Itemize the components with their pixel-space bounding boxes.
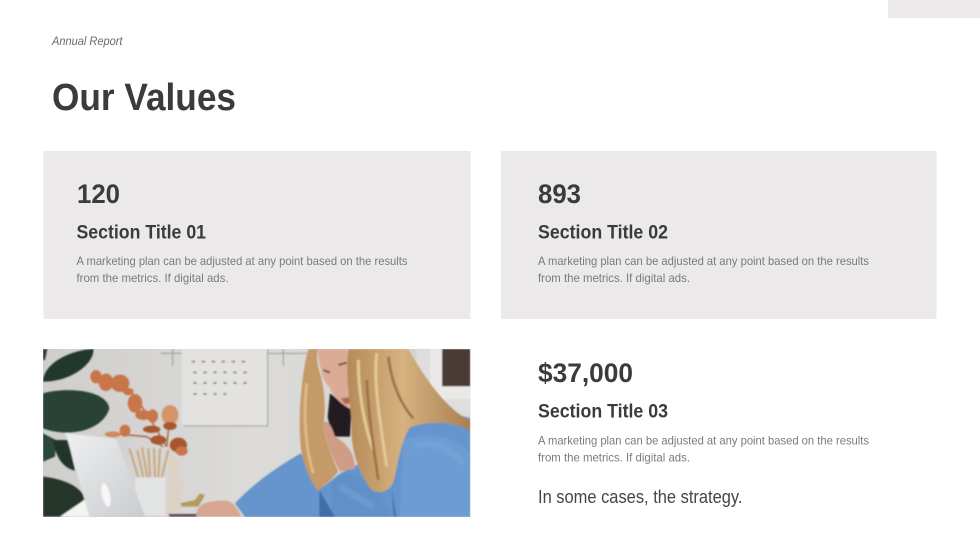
eucalyptus branch — [120, 392, 170, 448]
body text 03 — [538, 434, 869, 464]
face — [317, 349, 350, 408]
vase — [164, 456, 183, 513]
stat: 893: 893 — [538, 179, 581, 209]
pencils and cup — [129, 447, 168, 477]
closing line: In some cases, the strategy. — [538, 487, 742, 507]
eyebrow: Annual Report: Annual Report — [51, 36, 123, 48]
body text 03: A marketing plan can be adjusted at any point based on the results — [538, 434, 869, 448]
body text 02: A marketing plan can be adjusted at any point based on the results — [538, 254, 869, 268]
heading: section title 03: Section Title 03 — [538, 402, 668, 422]
phone — [328, 393, 352, 437]
hand at ear — [323, 422, 355, 472]
panel: section 02 — [501, 151, 936, 319]
heading: section title 02: Section Title 02 — [538, 222, 668, 244]
photo: woman on phone at desk — [43, 347, 470, 517]
gold object and hand on desk — [180, 493, 205, 507]
desk — [60, 501, 97, 517]
plant leaves — [43, 349, 93, 382]
body text 02 — [538, 254, 869, 285]
body text 01: from the metrics. If digital ads. — [76, 271, 228, 285]
body text 01: A marketing plan can be adjusted at any point based on the results — [76, 254, 408, 268]
laptop — [66, 433, 145, 517]
body text 02: from the metrics. If digital ads. — [538, 271, 690, 285]
body text 03: from the metrics. If digital ads. — [538, 450, 690, 464]
hair front — [347, 349, 470, 492]
body text 01 — [76, 254, 408, 285]
panel: section 01 — [44, 151, 470, 319]
hair back and left side — [300, 349, 338, 491]
sweater — [234, 416, 470, 517]
title: Our Values — [52, 77, 236, 119]
stat: $37,000: $37,000 — [538, 358, 633, 388]
corner tab — [888, 0, 980, 18]
heading: section title 01: Section Title 01 — [76, 222, 206, 244]
stat: 120: 120 — [77, 179, 120, 209]
